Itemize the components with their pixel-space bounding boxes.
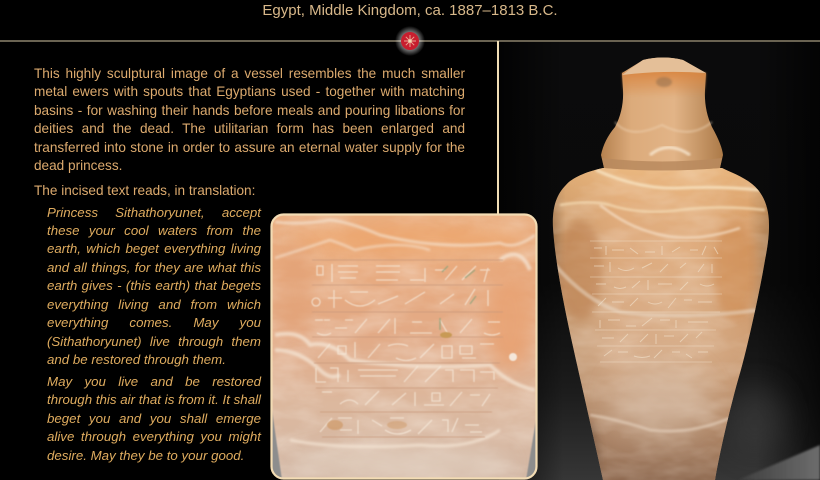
light wedge on floor	[738, 445, 820, 480]
vase body	[545, 165, 775, 480]
text block: description: basins - for washing their hands before meals and pouring libations for	[34, 103, 465, 118]
text block: translation: desire. May they be to your good.	[47, 448, 244, 463]
panel: inscription close-up	[270, 213, 538, 480]
text block: translation: earth gives - (this earth) that begets	[47, 278, 261, 293]
text block: description: transferred into stone in order to assure an eternal water supply for the	[34, 140, 465, 155]
subtitle: Egypt, Middle Kingdom, ca. 1887–1813 B.C.	[262, 2, 558, 19]
text block: translation: alive through everything you might	[47, 429, 261, 444]
vase lid	[601, 58, 723, 170]
text block: translation: May you live and be restored	[47, 374, 261, 389]
text block: translation: beget you and you shall emerge	[47, 411, 261, 426]
text block: description: dead princess.	[34, 158, 122, 173]
vase inscription panel	[590, 241, 722, 362]
text block: description: This highly sculptural image of a vessel resembles the much smaller	[34, 66, 465, 81]
text block: translation: (Sithathoryunet) live through them	[47, 334, 261, 349]
text block: translation: everything living and from which	[47, 297, 261, 312]
text block: translation: and all things, for they are what this	[47, 260, 261, 275]
text block: translation: everything comes. May you	[47, 315, 261, 330]
divider: horizontal rule	[0, 40, 820, 42]
divider: vertical rule	[497, 41, 499, 216]
mineral staining	[440, 266, 476, 330]
text block: translation intro: The incised text reads, in translation:	[34, 183, 255, 198]
text block: description	[34, 66, 465, 173]
icon: red rosette ornament	[396, 26, 424, 56]
alabaster banding	[275, 220, 535, 447]
text block: translation: earth, which beget everything living	[47, 241, 261, 256]
text block: description: metal ewers with spouts that Egyptians used - together with matching	[34, 84, 465, 99]
text block: description: deities and the dead. The utilitarian form has been enlarged and	[34, 121, 465, 136]
text block: translation: Princess Sithathoryunet, accept	[47, 205, 261, 220]
text block: translation: through this air that is from it. It shall	[47, 392, 261, 407]
text block: translation: and be restored through them.	[47, 352, 226, 367]
panel: vase photograph	[499, 42, 820, 480]
text block: translation	[47, 205, 262, 463]
text block: translation: these your cool waters from the	[47, 223, 261, 238]
inscription glyph rows	[312, 260, 503, 437]
